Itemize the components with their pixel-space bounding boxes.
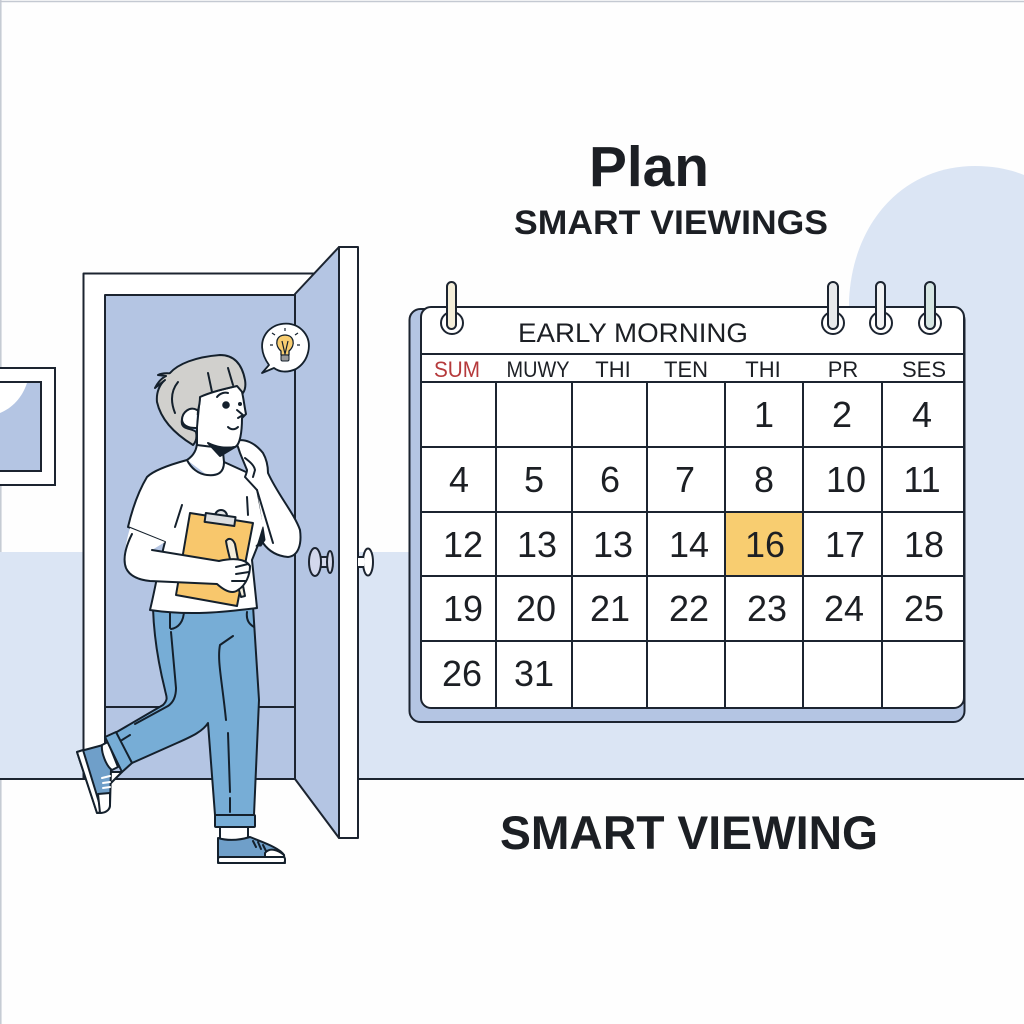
calendar dates: 20 [516, 588, 556, 629]
face [197, 385, 246, 448]
calendar dates: 25 [904, 588, 944, 629]
clipboard [176, 510, 253, 606]
door knob inner [309, 548, 333, 576]
neck edges [187, 442, 224, 462]
calendar dates: 31 [514, 653, 554, 694]
weekday headers [434, 357, 946, 382]
calendar dates: 11 [903, 459, 941, 500]
calendar dates: 8 [754, 459, 774, 500]
jeans [105, 606, 259, 827]
door knob outer [358, 548, 373, 576]
calendar dates: 10 [826, 459, 866, 500]
calendar backing [410, 309, 964, 722]
weekday headers: THI [595, 357, 631, 382]
calendar dates: 18 [904, 524, 944, 565]
calendar dates: 6 [600, 459, 620, 500]
calendar dates: 2 [832, 394, 852, 435]
shirt [128, 460, 264, 613]
calendar dates: 14 [669, 524, 709, 565]
calendar dates: 22 [669, 588, 709, 629]
calendar dates: 13 [593, 524, 633, 565]
calendar dates: 21 [590, 588, 630, 629]
weekday headers: SES [902, 357, 946, 382]
front shoe [218, 826, 285, 863]
calendar dates: 19 [443, 588, 483, 629]
wall picture [0, 368, 55, 485]
weekday headers: TEN [664, 357, 708, 382]
back shoe [77, 742, 122, 813]
calendar dates: 16 [745, 524, 785, 565]
calendar dates: 4 [912, 394, 932, 435]
neck [187, 440, 224, 475]
calendar dates [442, 394, 944, 694]
head [155, 355, 246, 456]
calendar dates: 4 [449, 459, 469, 500]
calendar dates: 5 [524, 459, 544, 500]
weekday headers: PR [828, 357, 858, 382]
calendar dates: 1 [754, 394, 774, 435]
calendar dates: 26 [442, 653, 482, 694]
title: Plan [589, 135, 709, 199]
binder rings [441, 282, 941, 334]
shirt folds [175, 497, 248, 527]
calendar grid [421, 354, 964, 708]
calendar dates: 17 [825, 524, 865, 565]
weekday headers: MUWY [506, 357, 570, 382]
calendar [410, 282, 964, 722]
weekday headers: THI [745, 357, 781, 382]
subtitle: SMART VIEWINGS [514, 204, 828, 242]
calendar dates: 13 [517, 524, 557, 565]
calendar page [421, 307, 964, 708]
calendar dates: 23 [747, 588, 787, 629]
calendar dates: 7 [675, 459, 695, 500]
calendar dates: 12 [443, 524, 483, 565]
weekday headers: SUM [434, 357, 480, 382]
pen [226, 539, 245, 597]
thought bubble with lightbulb [262, 324, 309, 373]
holding arm [125, 528, 250, 592]
calendar dates: 24 [824, 588, 864, 629]
floor line [0, 778, 1024, 780]
wall band [0, 552, 1024, 779]
ear [182, 409, 197, 428]
hair [155, 355, 245, 445]
wall circle [849, 166, 1024, 560]
person [77, 355, 300, 863]
highlighted date [726, 513, 803, 576]
door [84, 247, 373, 838]
calendar heading: EARLY MORNING [518, 318, 748, 348]
raised arm and hand [235, 440, 300, 557]
bottom caption: SMART VIEWING [500, 806, 878, 859]
